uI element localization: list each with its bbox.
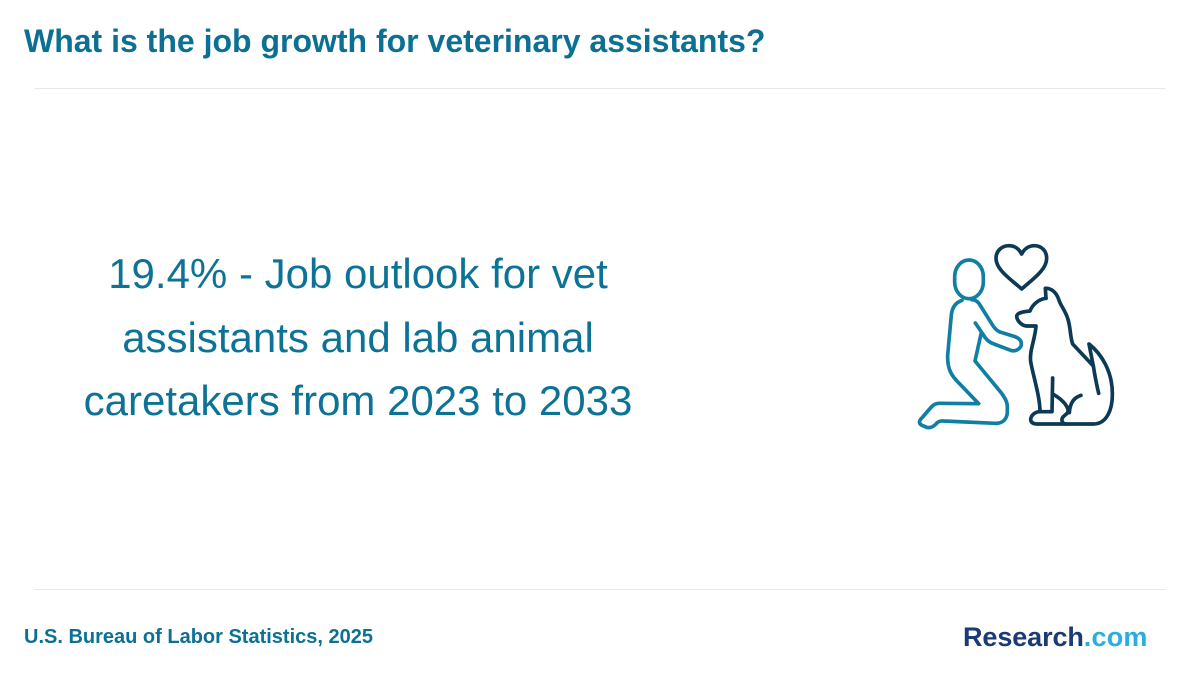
title: What is the job growth for veterinary assistants? (24, 23, 765, 59)
main statistic text: assistants and lab animal (122, 314, 594, 360)
main statistic text: caretakers from 2023 to 2033 (84, 377, 632, 424)
main statistic text: 19.4% - Job outlook for vet (108, 250, 608, 297)
icon: heart (996, 246, 1047, 289)
icon: person (920, 260, 1021, 428)
source note: U.S. Bureau of Labor Statistics, 2025 (24, 626, 373, 648)
main statistic text (84, 250, 632, 424)
icon: dog (1017, 288, 1112, 424)
logo: Research.com: Research.com (963, 622, 1148, 652)
icon: person petting dog with heart (918, 244, 1114, 430)
